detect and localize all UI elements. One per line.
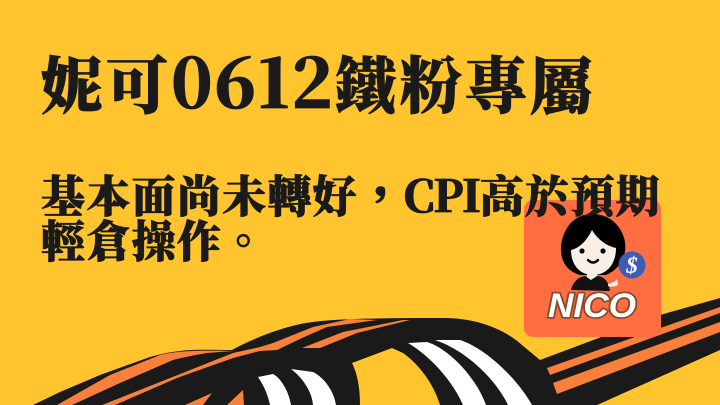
logo background [524,200,661,337]
NICO wordmark: NICO [548,287,636,325]
yellow window [352,348,440,405]
dollar badge: $ [625,253,638,278]
neck [587,272,597,280]
subtitle line one: 基本面尚未轉好，CPI高於預期 [41,161,661,225]
orange stripes [57,351,233,405]
black ribbon body [33,298,720,405]
face [571,230,616,275]
hand [608,279,618,287]
title: 妮可0612鐵粉專屬 [41,31,595,128]
body [571,276,610,291]
white stripes [258,374,291,405]
smile [588,260,598,262]
hair [561,214,625,275]
eyes [579,248,585,254]
subtitle line two: 輕倉操作。 [41,206,267,270]
